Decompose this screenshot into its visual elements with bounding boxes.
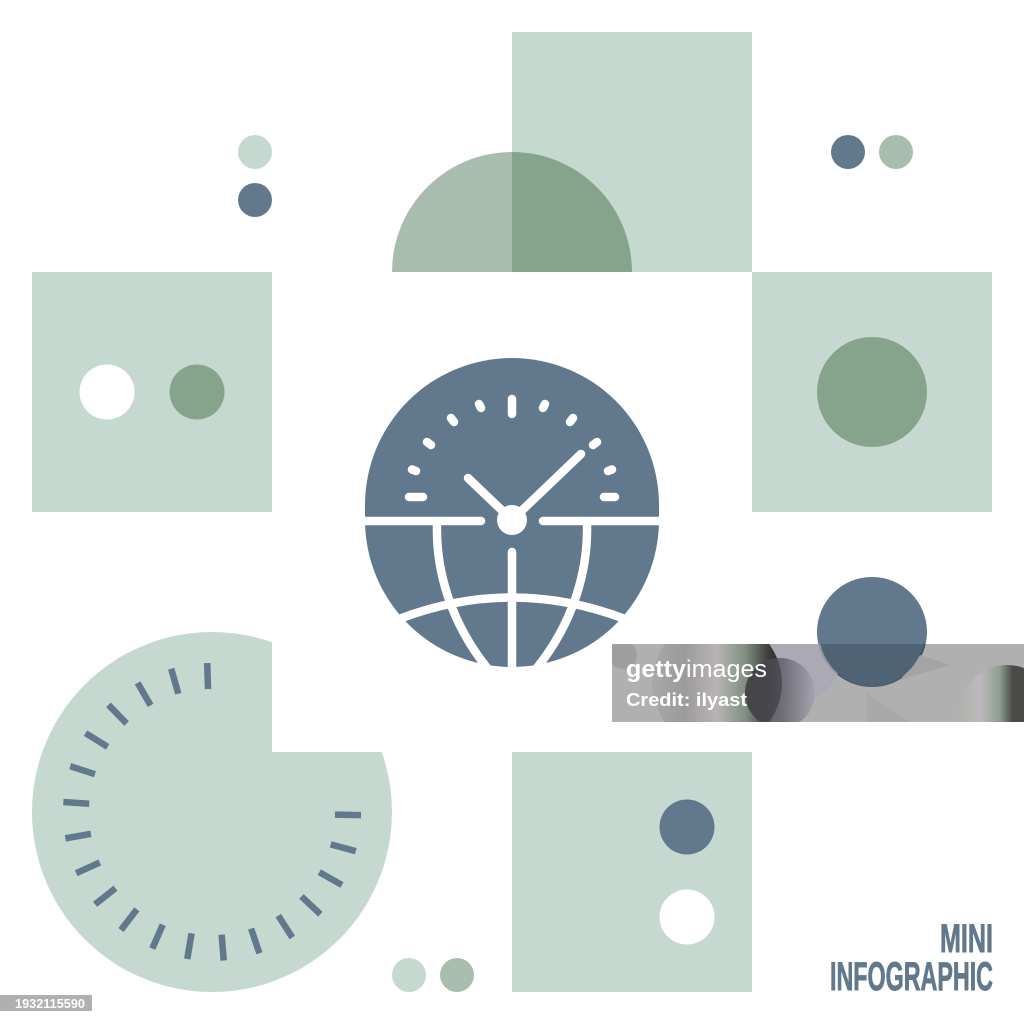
title: mini infographic: MINI: [940, 917, 993, 961]
dots: top right pair: [831, 135, 913, 169]
panel: top square with half circle: [392, 32, 752, 272]
panel: right square with circle: [752, 272, 992, 512]
dots: bottom pair: [392, 958, 474, 992]
panel: bottom square with two dots: [512, 752, 752, 992]
half circle left: [392, 152, 512, 272]
panel: left square with two dots: [32, 272, 272, 512]
clock ticks: [409, 399, 615, 497]
latitude arc: [399, 598, 625, 619]
navy circle right: [817, 577, 927, 687]
image id tag: 1932115590: [15, 997, 85, 1011]
half circle right: [512, 152, 632, 272]
watermark logo text: gettyimages: [626, 656, 767, 683]
image id tag: [0, 995, 92, 1011]
globe clock body: [365, 358, 659, 667]
title: mini infographic: [830, 917, 993, 999]
clock hub: [497, 505, 527, 535]
dots: top left pair: [238, 135, 272, 217]
clock hands: [468, 454, 581, 520]
watermark banner: Credit: ilyast: [626, 689, 747, 710]
horizon lines: [358, 517, 666, 525]
watermark banner: [612, 644, 1024, 722]
longitude curves: [437, 525, 587, 669]
dial: pie with ticks: [32, 632, 392, 992]
meridian: [508, 552, 516, 672]
re-tinted navy circle inside banner: [820, 644, 924, 687]
icon: globe clock: [358, 358, 666, 672]
